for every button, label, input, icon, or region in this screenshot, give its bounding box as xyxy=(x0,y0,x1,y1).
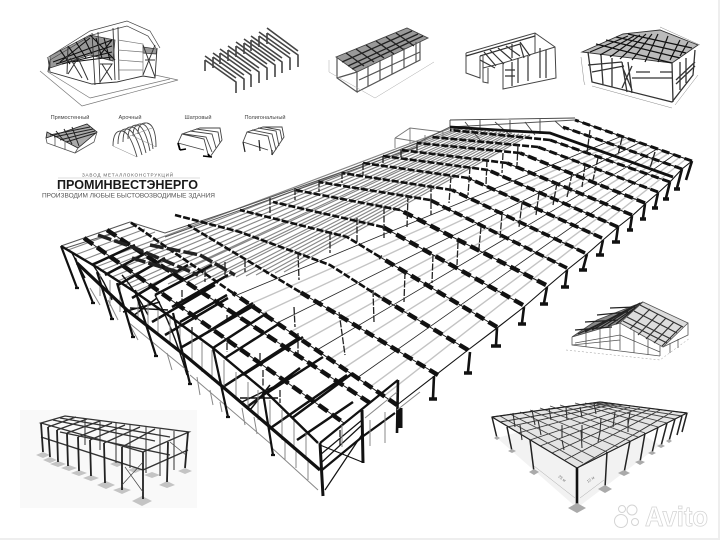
main steel frame building xyxy=(61,118,692,496)
footings xyxy=(36,452,192,506)
column feet xyxy=(75,288,275,455)
avito wordmark: Avito xyxy=(645,501,708,532)
ground shade xyxy=(497,410,660,508)
inset: row of truss frames xyxy=(205,28,298,93)
rafter core lines xyxy=(233,120,692,405)
rear columns xyxy=(85,419,174,476)
roof posts xyxy=(182,130,655,447)
inset: canopy structure with columns xyxy=(492,402,687,513)
lower roof row core lines xyxy=(84,230,370,423)
middle thick rafters xyxy=(430,153,645,268)
right columns xyxy=(433,161,692,398)
roof grid xyxy=(41,416,189,452)
left eave line xyxy=(61,246,318,443)
kicker: plant name: ЗАВОД МЕТАЛЛОКОНСТРУКЦИЙ xyxy=(82,170,173,178)
inner posts xyxy=(513,403,630,450)
column footings xyxy=(494,436,672,513)
inset: multi-bay frame on footings xyxy=(20,410,197,508)
band rafter ends xyxy=(130,130,550,297)
inset: hip roof building with dimensions xyxy=(581,27,700,108)
right eave xyxy=(397,161,692,405)
left eave belt xyxy=(77,263,320,470)
columns xyxy=(492,413,687,488)
inset: gable building with foundation grid xyxy=(566,302,690,360)
thin black purlins xyxy=(237,136,674,378)
dimension label: 25 м xyxy=(557,474,567,483)
inset background xyxy=(20,410,197,508)
avito logo dots xyxy=(614,505,638,528)
type label: polygonal: Полигональный xyxy=(244,114,286,121)
canopy edge beams xyxy=(492,402,687,468)
type label: straight wall: Прямостенный xyxy=(51,114,89,121)
lower roof cross beams xyxy=(92,245,353,440)
type label: arched: Арочный xyxy=(119,114,141,121)
company name: ПРОМИНВЕСТЭНЕРГО xyxy=(57,177,198,192)
lower roof rows xyxy=(84,230,370,423)
grey left wall members xyxy=(90,288,318,490)
wall window grid xyxy=(100,274,306,460)
curved truss members xyxy=(72,253,187,375)
canopy roof lattice xyxy=(492,402,687,468)
left wall columns xyxy=(61,246,273,455)
avito watermark xyxy=(614,501,708,532)
dimension lines xyxy=(534,466,604,498)
type icon: arched xyxy=(113,123,156,157)
ridge outline xyxy=(61,120,575,248)
right column feet xyxy=(429,189,680,399)
tagline: ПРОИЗВОДИМ ЛЮБЫЕ БЫСТОВОЗВОДИМЫЕ ЗДАНИЯ xyxy=(42,192,215,200)
light grey roof purlins xyxy=(250,138,686,396)
front columns xyxy=(41,423,188,499)
corner bracing xyxy=(122,442,186,492)
type icon: polygonal xyxy=(243,127,284,155)
near thick rafters xyxy=(233,210,546,405)
inset: open frame building xyxy=(466,33,556,89)
front gable frame xyxy=(320,380,420,496)
inset: long frame with dimensions xyxy=(329,28,434,98)
type icon: tent xyxy=(178,128,222,157)
company heading block xyxy=(42,170,215,200)
far thick rafters xyxy=(538,120,692,192)
X bracing details xyxy=(123,298,278,410)
small rear building xyxy=(395,128,443,148)
upper dark rows at junction xyxy=(98,235,235,275)
dense grey ridge band xyxy=(68,127,530,292)
dimension label: 12 м xyxy=(586,475,596,484)
mid rails xyxy=(41,432,188,470)
thick upper ridge beam xyxy=(450,127,673,177)
type icon: straight wall xyxy=(46,124,97,153)
type label: tent: Шатровый xyxy=(184,114,212,121)
near corner column xyxy=(576,468,578,506)
inset: arched hangar drawing xyxy=(40,21,178,106)
